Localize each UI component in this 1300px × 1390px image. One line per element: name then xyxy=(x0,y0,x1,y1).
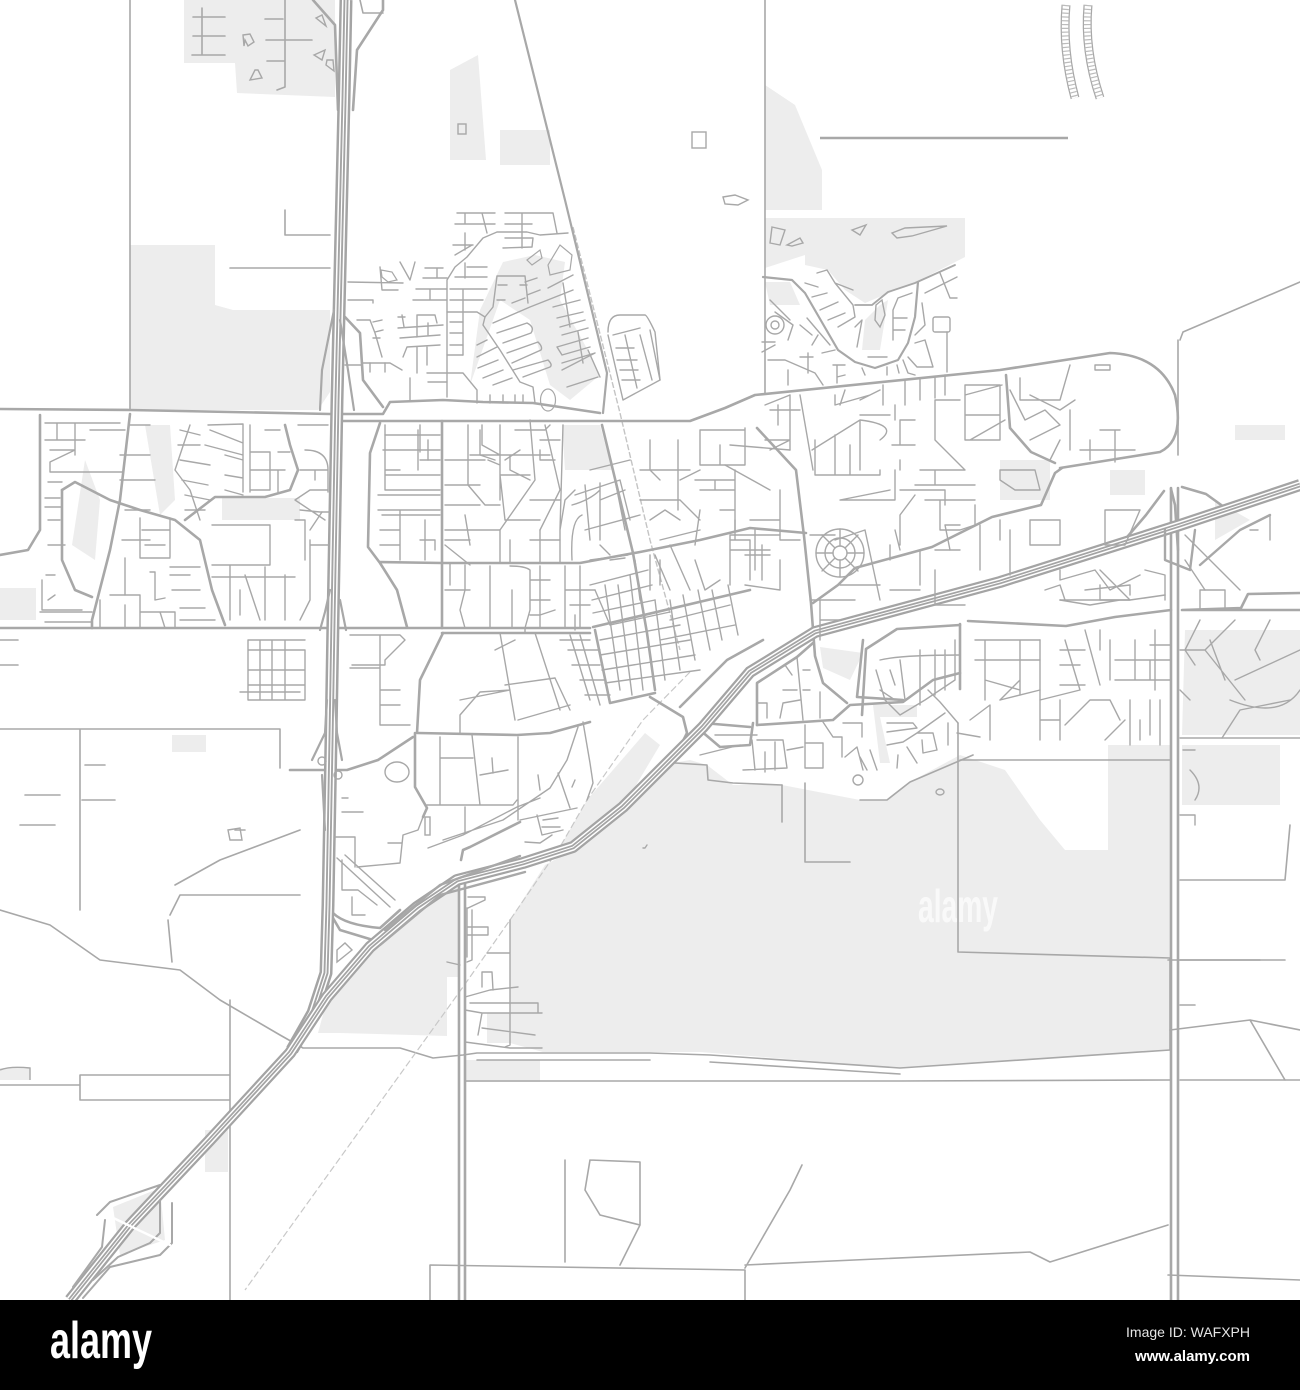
neighbourhood streets: west xyxy=(40,423,330,628)
small junction rings and ponds xyxy=(0,15,950,1080)
concentric circle neighbourhood xyxy=(816,529,864,577)
bottom footer bar xyxy=(0,1300,1300,1390)
freeway diagonal xyxy=(70,485,1300,1300)
east edge neighbourhood streets xyxy=(1180,515,1300,825)
website: www.alamy.com xyxy=(1134,1348,1250,1365)
neighbourhood streets: central xyxy=(378,420,800,633)
image id: Image ID: WAFXPH xyxy=(1126,1324,1250,1340)
downtown street grid xyxy=(590,570,738,695)
east neighbourhood streets: north of arterial xyxy=(730,365,1140,640)
watermark: alamy xyxy=(918,880,998,932)
freeway north-south xyxy=(292,0,354,1050)
thin dashed railway xyxy=(245,672,690,1290)
south-east streets near creek xyxy=(700,657,980,785)
top long bar xyxy=(820,137,1068,139)
east neighbourhood streets: south of freeway xyxy=(876,570,1170,760)
south-centre streets xyxy=(240,633,647,1048)
pond outlines north xyxy=(381,245,572,411)
footer logo: alamy xyxy=(50,1312,152,1370)
neighbourhood streets: north-east xyxy=(762,270,957,385)
neighbourhood streets: north centre xyxy=(345,213,660,403)
dashed north rail line xyxy=(573,227,680,650)
ladder strips top right xyxy=(1065,5,1100,98)
south-west interchange xyxy=(73,1185,172,1298)
